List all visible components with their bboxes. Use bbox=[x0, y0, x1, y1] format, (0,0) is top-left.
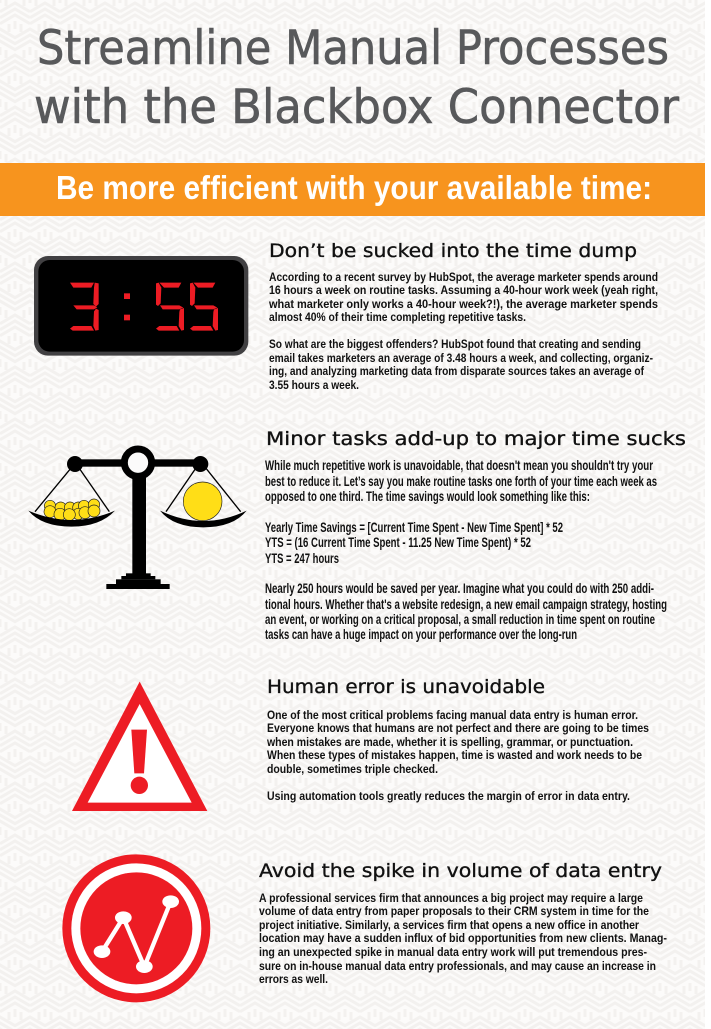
banner: be more efficient bbox=[0, 163, 705, 216]
text block: human error: double, sometimes triple checked. bbox=[267, 764, 438, 776]
title bbox=[34, 21, 680, 135]
text block: spike in volume: errors as well. bbox=[259, 974, 328, 986]
icon: balance scale bbox=[28, 449, 247, 589]
title: with the Blackbox Connector bbox=[34, 80, 680, 135]
text block: minor tasks: tasks can have a huge impact on your performance over the long-run bbox=[265, 627, 577, 642]
text block: spike in volume: project initiative. Similarly, a services firm that opens a new office in another bbox=[259, 920, 639, 932]
text block: minor tasks: YTS = 247 hours bbox=[265, 551, 339, 566]
heading: time dump: Don’t be sucked into the time dump bbox=[269, 240, 637, 262]
text block: spike in volume: volume of data entry from paper proposals to their CRM system in time for the bbox=[259, 906, 649, 918]
text block: minor tasks bbox=[265, 458, 667, 642]
heading: minor tasks: Minor tasks add-up to major time sucks bbox=[266, 428, 686, 450]
text block: human error: Everyone knows that humans are not perfect and there are going to be times bbox=[267, 723, 649, 735]
text block: time dump: According to a recent survey by HubSpot, the average marketer spends around bbox=[269, 272, 658, 284]
text block: spike in volume: ing an unexpected spike in manual data entry work will put tremendous pres- bbox=[259, 947, 647, 959]
heading: human error: Human error is unavoidable bbox=[267, 676, 545, 698]
banner: be more efficient: Be more efficient with your available time: bbox=[56, 169, 652, 206]
text block: spike in volume: sure on in-house manual data entry professionals, and may cause an increase in bbox=[259, 961, 656, 973]
text block: time dump: So what are the biggest offenders? HubSpot found that creating and sending bbox=[269, 339, 641, 351]
title: Streamline Manual Processes bbox=[37, 21, 669, 76]
text block: human error: Using automation tools greatly reduces the margin of error in data entry. bbox=[267, 791, 630, 803]
text block: minor tasks: Yearly Time Savings = [Current Time Spent - New Time Spent] * 52 bbox=[265, 520, 563, 535]
text block: time dump: 3.55 hours a week. bbox=[269, 380, 359, 392]
text block: human error: One of the most critical problems facing manual data entry is human error. bbox=[267, 710, 638, 722]
icon: digital clock bbox=[34, 256, 248, 356]
text block: spike in volume bbox=[259, 893, 667, 986]
text block: time dump: almost 40% of their time completing repetitive tasks. bbox=[269, 312, 526, 324]
text block: spike in volume: location may have a sudden influx of bid opportunities from new clients. Manag- bbox=[259, 933, 667, 945]
text block: minor tasks: opposed to one third. The time savings would look something like this: bbox=[265, 489, 590, 504]
text block: human error: When these types of mistakes happen, time is wasted and work needs to be bbox=[267, 750, 642, 762]
text block: time dump: 16 hours a week on routine tasks. Assuming a 40-hour work week (yeah right, bbox=[269, 285, 658, 297]
text block: human error bbox=[266, 710, 649, 803]
text block: human error: when mistakes are made, whether it is spelling, grammar, or punctuation. bbox=[266, 737, 633, 749]
text block: spike in volume: A professional services firm that announces a big project may require a large bbox=[259, 893, 643, 905]
text block: time dump: what marketer only works a 40-hour week?!), the average marketer spends bbox=[268, 299, 658, 311]
heading: spike in volume: Avoid the spike in volume of data entry bbox=[259, 860, 662, 882]
text block: time dump: email takes marketers an average of 3.48 hours a week, and collecting, organiz- bbox=[269, 353, 653, 365]
text block: minor tasks: YTS = (16 Current Time Spent - 11.25 New Time Spent) * 52 bbox=[265, 535, 531, 550]
icon: spike chart in circle bbox=[62, 854, 210, 1002]
text block: time dump: ing, and analyzing marketing data from disparate sources takes an average of bbox=[269, 366, 644, 378]
icon: warning triangle bbox=[72, 682, 207, 811]
text block: time dump bbox=[268, 272, 658, 392]
